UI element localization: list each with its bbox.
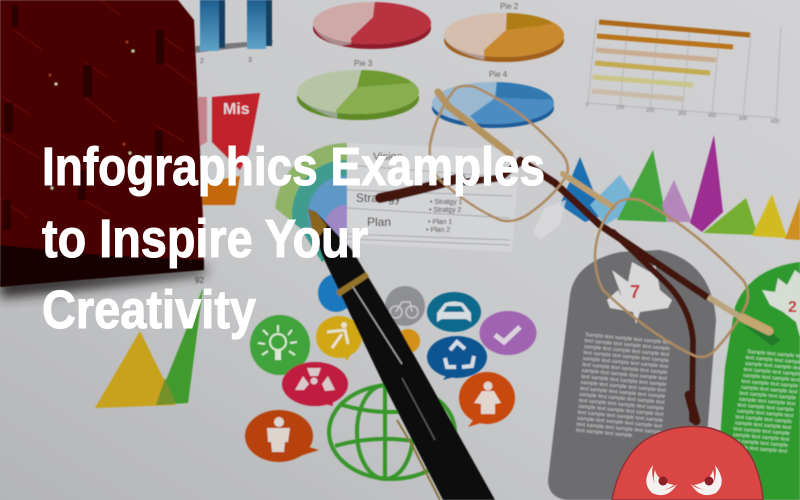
pen <box>308 209 495 500</box>
plan table: Strategy <box>356 191 401 205</box>
icon: light bulb <box>250 315 310 375</box>
plan table: • Stratgy 2 <box>429 207 462 214</box>
glasses: gold temple left <box>438 92 510 154</box>
title: Infographics Examples <box>42 137 545 197</box>
card sample text: green: sample text sample text <box>737 408 794 419</box>
3D bar chart <box>193 0 273 65</box>
info card: grey <box>548 250 716 500</box>
card sample text: grey: text sample text sample text sample <box>576 422 662 436</box>
left triangle chart: 5 <box>141 319 146 328</box>
plan table: Plan <box>367 215 391 229</box>
card sample text: green: sample text sample text <box>730 444 788 455</box>
card sample text: green: text sample text sample <box>733 426 790 437</box>
monster left eye <box>646 465 677 495</box>
pie 4 label: Pie 4 <box>489 70 508 79</box>
card sample text: grey: sample text sample text sample text <box>579 392 665 406</box>
card sample text: grey: text sample text sample text sample <box>581 374 667 388</box>
Mis banner: Mis <box>223 101 250 118</box>
title <box>42 137 545 340</box>
card sample text: grey <box>576 332 672 442</box>
concentric ring chart <box>274 142 348 262</box>
plan table <box>347 143 520 252</box>
3D bar chart: 3 <box>248 57 252 64</box>
coloured triangle chart <box>560 135 800 240</box>
card sample text: grey: text sample text sample text sample <box>577 410 663 424</box>
card sample text: grey: text sample text sample text sample <box>583 350 669 364</box>
icon: bicycle <box>385 286 425 326</box>
card sample text: grey: text sample text sample <box>576 428 633 439</box>
card sample text: green <box>730 348 800 456</box>
card sample text: green: text sample text sample <box>735 414 792 425</box>
card sample text: grey: text sample text sample text sample <box>580 386 666 400</box>
left triangle chart: 92 <box>195 276 204 285</box>
info card: green <box>716 262 800 500</box>
card sample text: green: text sample text sample <box>743 367 800 378</box>
pie 2 label: Pie 2 <box>500 2 519 11</box>
pie chart 2 <box>444 10 570 62</box>
icon: running person <box>316 316 362 361</box>
card sample text: grey: sample text sample text sample text <box>577 416 663 430</box>
left triangle chart <box>95 276 204 408</box>
horizontal bar chart: 500 <box>739 116 748 122</box>
glasses: right hinge <box>708 297 742 318</box>
horizontal bar chart <box>586 20 781 125</box>
horizontal bar chart: 200 <box>646 108 655 114</box>
card sample text: green: sample text sample text <box>743 373 800 384</box>
icon: globe <box>329 385 455 479</box>
horizontal bar chart: 0 <box>586 102 589 108</box>
card sample text: grey: sample text sample text sample text <box>584 344 670 358</box>
card sample text: green: text sample text sample <box>737 402 794 413</box>
plan table: • Plan 1 <box>428 219 452 226</box>
icon: recycle <box>427 336 487 380</box>
card sample text: grey: Sample text sample text sample text <box>585 332 672 346</box>
card sample text: grey: sample text sample text sample text <box>580 380 667 394</box>
card sample text: grey: sample text sample text sample text <box>578 404 664 418</box>
card sample text: green: text sample text sample <box>731 438 788 449</box>
card sample text: green: text sample text sample <box>739 391 796 401</box>
card sample text: green: sample text sample text <box>733 432 790 443</box>
card sample text: green: sample text sample text <box>739 396 796 407</box>
horizontal bar chart: 100 <box>616 105 625 111</box>
plan table: • Stratgy 1 <box>430 199 463 206</box>
icon: radiation <box>282 362 348 406</box>
icon: person <box>245 410 319 462</box>
pie 3 label: Pie 3 <box>354 59 373 68</box>
horizontal bar chart: 600 <box>771 119 780 125</box>
Mis banner <box>197 93 260 205</box>
card sample text: green: sample text sample text <box>735 420 792 431</box>
icon: blue circle <box>318 274 354 312</box>
card sample text: green: text sample text sample <box>741 379 798 390</box>
card sample text: grey: sample text sample text sample text <box>583 356 669 370</box>
hinge shadow <box>744 325 781 346</box>
card sample text: grey: text sample text sample text sample <box>578 398 664 412</box>
plan table: • Plan 2 <box>426 227 450 234</box>
icon: orange circle <box>396 329 420 353</box>
title: to Inspire Your <box>42 209 368 269</box>
3D bar chart: 2 <box>200 58 204 65</box>
card sample text: green: sample text sample text <box>741 385 798 396</box>
icon: check mark <box>480 311 536 355</box>
pie chart 3 <box>297 68 425 120</box>
monster right eye <box>691 465 722 495</box>
card sample text: grey: text sample text sample text sample <box>584 338 670 352</box>
glasses: left lens <box>430 86 568 221</box>
leaf: grey card <box>607 262 672 324</box>
red box <box>0 0 204 287</box>
glasses: bridge <box>563 174 613 207</box>
pie chart 1 <box>313 0 440 50</box>
glasses: brown temple arms <box>380 160 707 421</box>
red box shadow <box>0 266 205 298</box>
icon: woman <box>459 372 515 427</box>
glasses: right lens <box>595 199 748 357</box>
pie chart 4 <box>432 78 558 128</box>
icon: car <box>427 292 481 332</box>
plan table: Vision <box>373 151 403 163</box>
nose pad <box>533 200 566 240</box>
title: Creativity <box>42 280 256 340</box>
card sample text: grey: sample text sample text sample text <box>581 368 668 382</box>
card number 2: 2 <box>788 299 797 316</box>
red monster mascot <box>612 426 763 500</box>
leaf: green card <box>762 270 800 337</box>
card number 1: 7 <box>630 282 640 302</box>
glasses <box>380 86 781 421</box>
card sample text: grey: text sample text sample text sample <box>582 362 668 376</box>
horizontal bar chart: 300 <box>678 111 687 117</box>
horizontal bar chart: 400 <box>708 113 717 119</box>
